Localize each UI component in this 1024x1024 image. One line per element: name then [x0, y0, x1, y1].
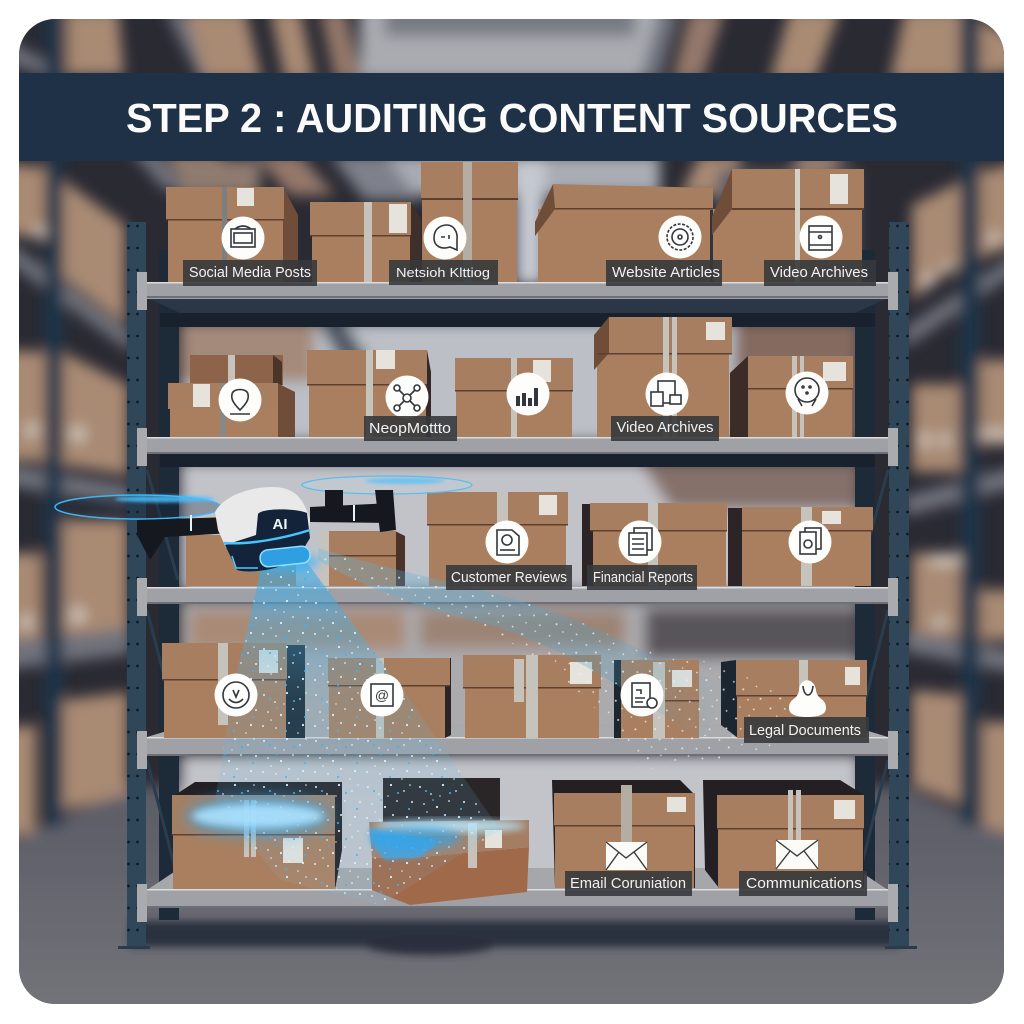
label: Social Media Posts	[183, 260, 317, 286]
label: Communications: Communications	[746, 876, 862, 892]
drone	[55, 476, 472, 572]
label: Email Coruniation	[565, 871, 692, 896]
icon: at sign: @	[375, 687, 389, 703]
shelf 5	[147, 868, 888, 908]
label: Website Articles: Website Articles	[612, 265, 720, 281]
data particle stream	[318, 548, 730, 740]
arms	[137, 490, 396, 560]
floor	[0, 786, 1024, 1024]
ceiling and top strip	[360, 0, 660, 80]
label: garbled second: Netsioh Klttiog	[396, 265, 490, 280]
drone body	[215, 487, 310, 548]
left front upright	[118, 222, 178, 949]
shelf 3	[147, 587, 888, 604]
box: at sign	[328, 658, 451, 738]
label: garbled network	[364, 416, 457, 441]
box: customer reviews	[427, 492, 568, 586]
labels	[183, 260, 876, 896]
scan glow left box	[186, 799, 330, 833]
title banner	[19, 73, 1004, 161]
brackets	[137, 272, 898, 922]
box: second	[310, 202, 421, 282]
label: Legal Documents: Legal Documents	[749, 723, 861, 739]
label: Website Articles	[606, 260, 722, 286]
icons row 4	[214, 674, 826, 717]
box: website	[535, 184, 713, 282]
label: garbled second	[389, 260, 498, 285]
icons row 2	[218, 372, 828, 422]
box: analytics	[455, 358, 573, 437]
label: Financial Reports: Financial Reports	[593, 570, 693, 586]
AI mark: AI	[272, 516, 288, 533]
label: Social Media Posts: Social Media Posts	[189, 265, 311, 281]
beam light cone	[215, 560, 500, 905]
box: email	[552, 780, 695, 888]
scan glow right box	[369, 820, 526, 860]
icon: smile	[214, 674, 258, 716]
icon: community	[786, 372, 828, 414]
box: scanned right	[369, 778, 529, 905]
icon: legal person	[789, 680, 826, 717]
box: behind drone left	[186, 535, 296, 586]
label: Legal Documents	[744, 717, 869, 743]
label: Video Archives: Video Archives	[770, 265, 868, 281]
floor shadow under rack	[130, 921, 900, 955]
boxes on shelf 3	[186, 492, 873, 586]
bay 3 backdrop	[180, 462, 860, 592]
label: Video Archives	[764, 260, 876, 286]
boxes on shelf 5	[172, 778, 864, 905]
box: smile	[162, 643, 305, 738]
lens glow halo	[244, 552, 320, 572]
bay 4 backdrop	[179, 604, 855, 727]
label: Video Archives row 2: Video Archives	[616, 420, 714, 436]
box: video 2	[594, 317, 732, 437]
icon: location pin	[218, 378, 262, 422]
shelf 4	[147, 727, 888, 756]
label: Communications	[739, 871, 867, 896]
label: Customer Reviews	[446, 565, 572, 590]
box: stacked location	[168, 355, 295, 437]
box: plain	[463, 655, 601, 738]
box: video	[712, 169, 864, 282]
icon: social media posts	[222, 216, 264, 260]
icon: envelope right	[776, 840, 818, 869]
boxes on shelf 1	[166, 162, 864, 282]
box: financial	[582, 503, 727, 586]
title: STEP 2 : AUDITING CONTENT SOURCES	[126, 95, 898, 141]
shelving rack	[118, 222, 917, 949]
icon: disc documents	[788, 520, 832, 564]
label: Email Coruniation: Email Coruniation	[570, 876, 686, 892]
icon: analytics chart	[506, 372, 550, 416]
lens	[224, 530, 311, 568]
label: Financial Reports	[587, 565, 697, 590]
shelf 1	[147, 282, 888, 327]
email icons	[606, 840, 818, 870]
box: document shield	[614, 660, 699, 738]
icon: envelope left	[606, 842, 647, 870]
icon: document shield	[620, 674, 664, 716]
camera module	[225, 509, 310, 572]
bay 1 backdrop (lower part)	[515, 160, 545, 285]
boxes on shelf 4	[162, 643, 867, 738]
icon: video archive	[800, 216, 842, 258]
icons row 3	[486, 520, 832, 564]
box: third	[728, 507, 873, 586]
background uprights	[45, 0, 63, 827]
icon: financial reports	[618, 520, 662, 564]
boxes on shelf 2	[168, 317, 853, 437]
label: Customer Reviews: Customer Reviews	[451, 570, 567, 586]
icon: network	[386, 376, 428, 418]
box: network	[307, 350, 431, 437]
bay 5 backdrop	[179, 756, 855, 868]
right rotor	[302, 476, 472, 494]
stream particles	[318, 548, 800, 770]
icon: customer reviews	[486, 520, 528, 564]
right front upright	[858, 222, 917, 949]
shelf 2	[147, 437, 888, 467]
box: behind drone right	[320, 531, 405, 586]
top strip row behind the rack	[360, 155, 660, 195]
box: legal	[721, 660, 867, 738]
box: community	[730, 356, 853, 437]
right side shelves	[902, 161, 1004, 844]
left side shelves	[19, 161, 132, 846]
beam particles	[215, 560, 500, 905]
label: Video Archives row 2	[611, 416, 719, 441]
scan beam	[186, 548, 800, 905]
icon: at sign	[360, 674, 404, 716]
left rotor	[55, 495, 221, 519]
box: tall	[421, 162, 518, 282]
box: communications	[703, 780, 864, 888]
box: social media	[166, 187, 298, 282]
icon: chat bubble	[424, 216, 466, 260]
icon: file stack	[646, 372, 688, 416]
bay 2 backdrop	[179, 327, 746, 437]
icon: gear	[658, 216, 702, 258]
back uprights	[159, 250, 875, 920]
label: garbled network: NeopMottto	[369, 421, 451, 437]
icons row 1	[222, 216, 842, 260]
box: scanned left	[172, 782, 342, 890]
